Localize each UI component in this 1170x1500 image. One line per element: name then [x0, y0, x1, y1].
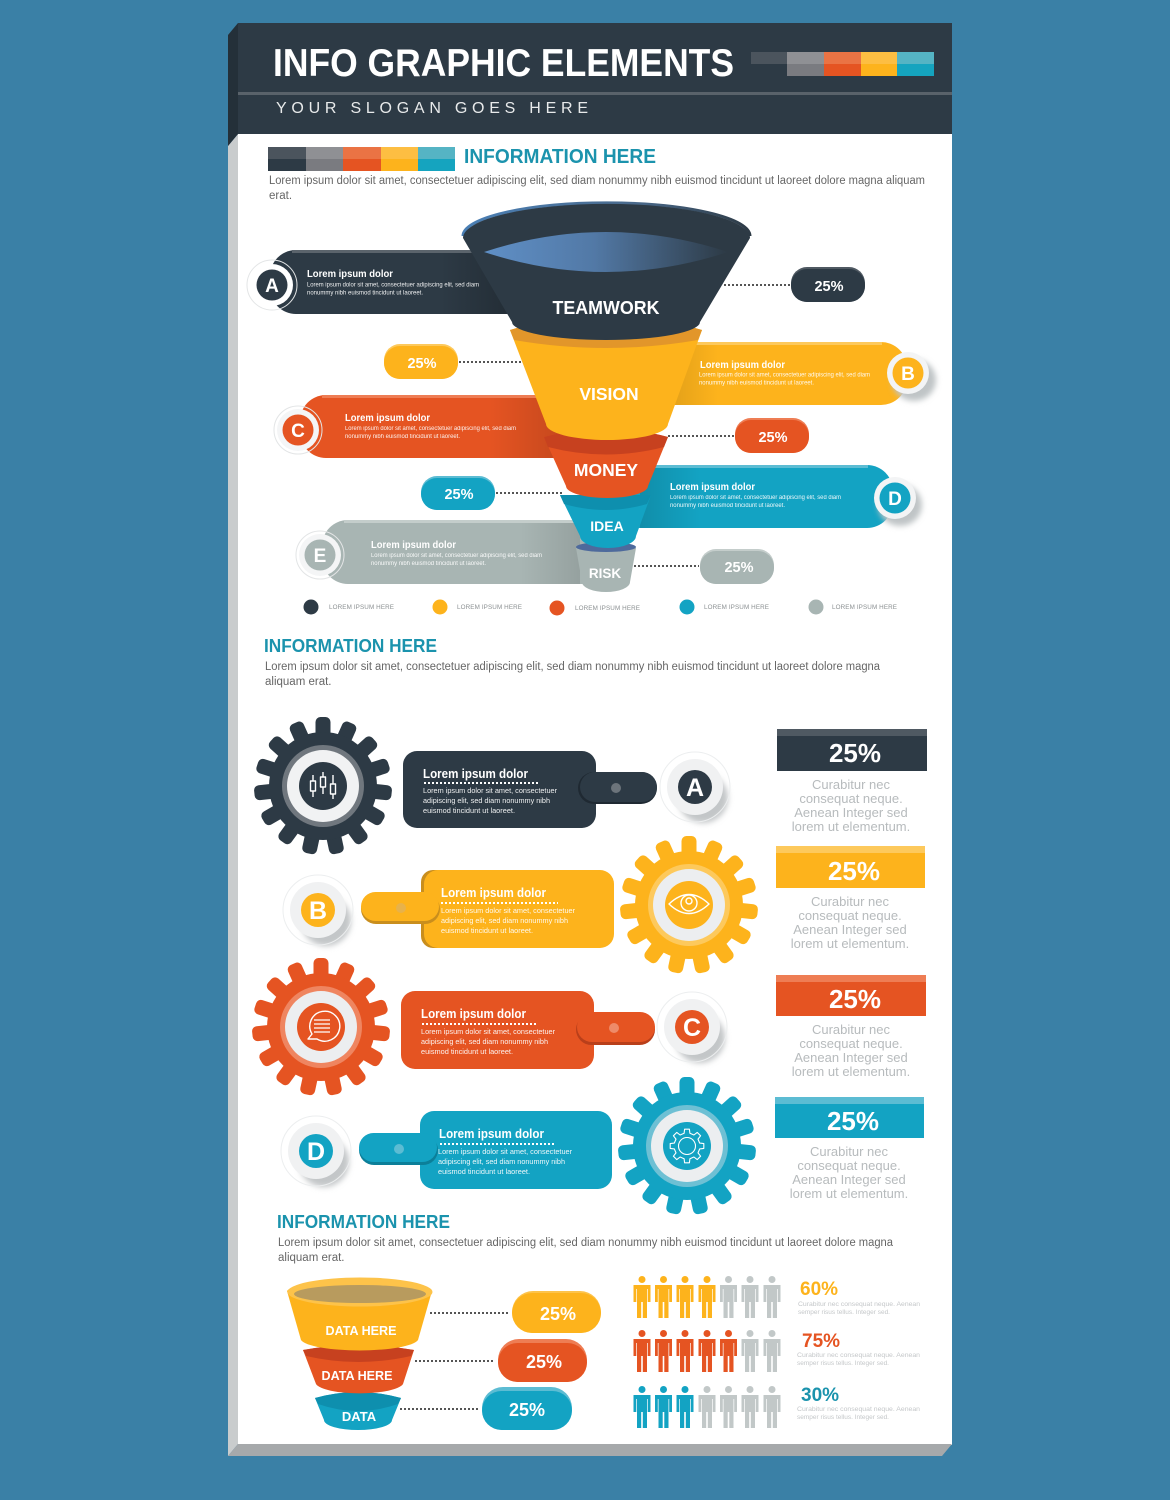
badge C: C	[291, 421, 305, 442]
stat D: lorem ut elementum.	[790, 1186, 908, 1201]
pill: 25% grey	[634, 549, 774, 584]
badge A	[247, 260, 297, 310]
callout card B: euismod tincidunt ut laoreet.	[441, 926, 533, 935]
callout card B: Lorem ipsum dolor sit amet, consectetuer	[441, 906, 575, 915]
badge C large	[657, 992, 727, 1063]
icon: cog	[670, 1129, 704, 1163]
funnel legend: LOREM IPSUM HERE	[457, 604, 522, 611]
body text: section 3: Lorem ipsum dolor sit amet, consectetuer adipiscing elit, sed diam nonummy nibh euismod tincidunt ut laoreet dolore magna	[278, 1237, 894, 1249]
stat C: Curabitur nec	[812, 1022, 891, 1037]
stat C: consequat neque.	[799, 1036, 903, 1051]
small funnel: data here orange	[303, 1345, 414, 1393]
bar A	[247, 250, 540, 314]
stat D: consequat neque.	[797, 1158, 901, 1173]
stat A: lorem ut elementum.	[792, 819, 910, 834]
funnel: idea: IDEA	[590, 518, 624, 534]
callout card C: adipiscing elit, sed diam nonummy nibh	[421, 1037, 548, 1046]
heading: section 2: INFORMATION HERE	[264, 635, 437, 656]
badge C large: C	[683, 1014, 701, 1042]
stat text: 60%: Curabitur nec consequat neque. Aenean	[798, 1302, 920, 1308]
heading: section 3: INFORMATION HERE	[277, 1211, 450, 1232]
callout card B: adipiscing elit, sed diam nonummy nibh	[441, 916, 568, 925]
bar C: Lorem ipsum dolor	[345, 412, 430, 424]
badge B large: B	[309, 897, 327, 925]
pill: 25% teal: 25%	[444, 487, 474, 503]
pill: small funnel orange: 25%	[526, 1352, 562, 1372]
gear D	[618, 1077, 756, 1215]
stat D: 25%	[827, 1106, 879, 1136]
stat A: 25%	[829, 738, 881, 768]
badge D	[874, 477, 922, 526]
pill: 25% dark	[724, 267, 865, 302]
stat B: Aenean Integer sed	[793, 922, 907, 937]
body text: section 3: aliquam erat.	[278, 1252, 344, 1264]
stat A: Curabitur nec	[812, 777, 891, 792]
funnel: money	[544, 428, 668, 498]
people row: 60%	[634, 1276, 780, 1318]
funnel: risk	[576, 542, 636, 592]
funnel: vision	[510, 315, 702, 440]
stat text: 60%	[798, 1279, 920, 1316]
callout card B	[361, 870, 614, 948]
stat B: lorem ut elementum.	[791, 936, 909, 951]
stat A: consequat neque.	[799, 791, 903, 806]
callout card D: Lorem ipsum dolor sit amet, consectetuer	[438, 1147, 572, 1156]
body text: section 1	[269, 175, 925, 202]
stat A: Aenean Integer sed	[794, 805, 908, 820]
gear C	[252, 958, 390, 1096]
badge B large	[283, 875, 353, 946]
body text: section 1: Lorem ipsum dolor sit amet, consectetuer adipiscing elit, sed diam nonummy nibh euismod tincidunt ut laoreet dolore magna aliquam	[269, 175, 925, 187]
stat text: 75%: 75%	[802, 1331, 840, 1352]
bar E: Lorem ipsum dolor sit amet, consectetuer adipiscing elit, sed diam	[371, 553, 542, 559]
icon: eye	[669, 894, 709, 914]
callout card D: euismod tincidunt ut laoreet.	[438, 1167, 530, 1176]
badge A: A	[265, 276, 279, 297]
stat B: consequat neque.	[798, 908, 902, 923]
page sheet	[228, 134, 952, 1456]
body text: section 3	[278, 1237, 894, 1264]
bar D: nonummy nibh euismod tincidunt ut laoreet.	[670, 503, 785, 509]
pill: small funnel teal: 25%	[509, 1400, 545, 1420]
badge E: E	[314, 546, 326, 567]
bar B	[640, 342, 936, 405]
title: INFO GRAPHIC ELEMENTS	[273, 42, 734, 85]
body text: section 2: Lorem ipsum dolor sit amet, consectetuer adipiscing elit, sed diam nonummy nibh euismod tincidunt ut laoreet dolore magna	[265, 661, 881, 673]
callout card C: Lorem ipsum dolor sit amet, consectetuer	[421, 1027, 555, 1036]
stat D	[775, 1097, 924, 1201]
stat D: Aenean Integer sed	[792, 1172, 906, 1187]
small funnel: data teal: DATA	[342, 1409, 377, 1424]
pill: 25% yellow	[384, 344, 522, 379]
funnel: risk: RISK	[589, 566, 621, 581]
icon: sliders	[310, 772, 336, 799]
stat text: 30%: semper risus tellus. Integer sed.	[797, 1415, 889, 1421]
stat C: Aenean Integer sed	[794, 1050, 908, 1065]
funnel legend: LOREM IPSUM HERE	[575, 605, 640, 612]
colour swatches: section 1	[268, 147, 455, 171]
bar A: nonummy nibh euismod tincidunt ut laoreet.	[307, 290, 423, 296]
callout card D: Lorem ipsum dolor	[439, 1127, 544, 1141]
funnel legend: LOREM IPSUM HERE	[329, 604, 394, 611]
funnel legend	[304, 600, 897, 616]
badge D large	[281, 1116, 351, 1187]
heading: section 1: INFORMATION HERE	[464, 145, 656, 168]
header band	[228, 23, 952, 146]
bar D: Lorem ipsum dolor	[670, 481, 755, 493]
badge B: B	[901, 364, 915, 385]
bar E: Lorem ipsum dolor	[371, 539, 456, 551]
stat text: 75%: semper risus tellus. Integer sed.	[797, 1361, 889, 1367]
pill: 25% teal	[421, 476, 562, 510]
callout card C: euismod tincidunt ut laoreet.	[421, 1047, 513, 1056]
callout card C: Lorem ipsum dolor	[421, 1007, 526, 1021]
bar C: Lorem ipsum dolor sit amet, consectetuer adipiscing elit, sed diam	[345, 426, 516, 432]
stat C: lorem ut elementum.	[792, 1064, 910, 1079]
stat text: 30%	[797, 1385, 920, 1421]
badge A large	[660, 752, 730, 823]
bar E: nonummy nibh euismod tincidunt ut laoreet.	[371, 561, 486, 567]
bar A: Lorem ipsum dolor	[307, 268, 393, 280]
badge B	[887, 352, 936, 401]
stat text: 30%: Curabitur nec consequat neque. Aenean	[797, 1407, 920, 1413]
callout card A: Lorem ipsum dolor	[423, 767, 528, 781]
pill: 25% orange: 25%	[758, 430, 788, 446]
pill: small funnel yellow	[430, 1291, 601, 1333]
callout card D	[359, 1111, 612, 1189]
people row: 75%	[634, 1330, 780, 1372]
callout card A: adipiscing elit, sed diam nonummy nibh	[423, 796, 550, 805]
badge E	[296, 531, 344, 579]
body text: section 1: erat.	[269, 190, 292, 202]
gear A	[254, 717, 392, 855]
bar B: nonummy nibh euismod tincidunt ut laoreet.	[699, 380, 814, 386]
callout card D: adipiscing elit, sed diam nonummy nibh	[438, 1157, 565, 1166]
bar C: nonummy nibh euismod tincidunt ut laoreet.	[345, 434, 460, 440]
pill: 25% dark: 25%	[814, 279, 844, 295]
stat B: Curabitur nec	[811, 894, 890, 909]
body text: section 2: aliquam erat.	[265, 676, 331, 688]
bar A: Lorem ipsum dolor sit amet, consectetuer adipiscing elit, sed diam	[307, 282, 479, 288]
pill: small funnel orange	[415, 1339, 587, 1382]
bar D: Lorem ipsum dolor sit amet, consectetuer adipiscing elit, sed diam	[670, 495, 841, 501]
funnel: vision: VISION	[579, 384, 639, 404]
bar E	[296, 520, 612, 584]
stat A	[777, 729, 927, 834]
callout card A: euismod tincidunt ut laoreet.	[423, 806, 515, 815]
small funnel: data here yellow	[287, 1278, 432, 1350]
pill: 25% yellow: 25%	[407, 356, 437, 372]
funnel: teamwork	[463, 203, 750, 340]
badge C	[274, 406, 322, 454]
stat C	[776, 975, 926, 1079]
stat D: Curabitur nec	[810, 1144, 889, 1159]
badge D: D	[888, 489, 902, 510]
colour swatches: header	[751, 52, 934, 76]
bar B: Lorem ipsum dolor	[700, 359, 785, 371]
stat C: 25%	[829, 984, 881, 1014]
gear B	[620, 836, 758, 974]
body text: section 2	[265, 661, 881, 688]
pill: small funnel yellow: 25%	[540, 1304, 576, 1324]
pill: 25% orange	[668, 418, 809, 453]
icon: chat bubble	[308, 1011, 340, 1041]
callout card C	[401, 991, 655, 1069]
badge D large: D	[307, 1138, 325, 1166]
funnel legend: LOREM IPSUM HERE	[832, 604, 897, 611]
funnel: idea	[560, 495, 651, 548]
small funnel: data here orange: DATA HERE	[322, 1368, 393, 1383]
bar C	[274, 395, 580, 458]
small funnel: data here yellow: DATA HERE	[326, 1323, 397, 1338]
bar D	[610, 465, 922, 528]
callout card B: Lorem ipsum dolor	[441, 886, 546, 900]
badge A large: A	[686, 774, 704, 802]
slogan: YOUR SLOGAN GOES HERE	[276, 100, 588, 117]
callout card A	[403, 751, 657, 828]
people row: 30%	[634, 1386, 780, 1428]
funnel: money: MONEY	[574, 460, 638, 480]
stat B: 25%	[828, 856, 880, 886]
stat text: 30%: 30%	[801, 1385, 839, 1406]
callout card A: Lorem ipsum dolor sit amet, consectetuer	[423, 786, 557, 795]
stat text: 75%	[797, 1331, 920, 1367]
pill: 25% grey: 25%	[724, 560, 754, 576]
stat text: 60%: semper risus tellus. Integer sed.	[798, 1310, 890, 1316]
pill: small funnel teal	[400, 1387, 572, 1430]
stat B	[776, 846, 925, 951]
bar B: Lorem ipsum dolor sit amet, consectetuer adipiscing elit, sed diam	[699, 372, 870, 378]
small funnel: data teal	[315, 1392, 401, 1430]
stat text: 60%: 60%	[800, 1279, 838, 1300]
funnel: teamwork: TEAMWORK	[552, 298, 660, 318]
stat text: 75%: Curabitur nec consequat neque. Aenean	[797, 1353, 920, 1359]
funnel legend: LOREM IPSUM HERE	[704, 604, 769, 611]
